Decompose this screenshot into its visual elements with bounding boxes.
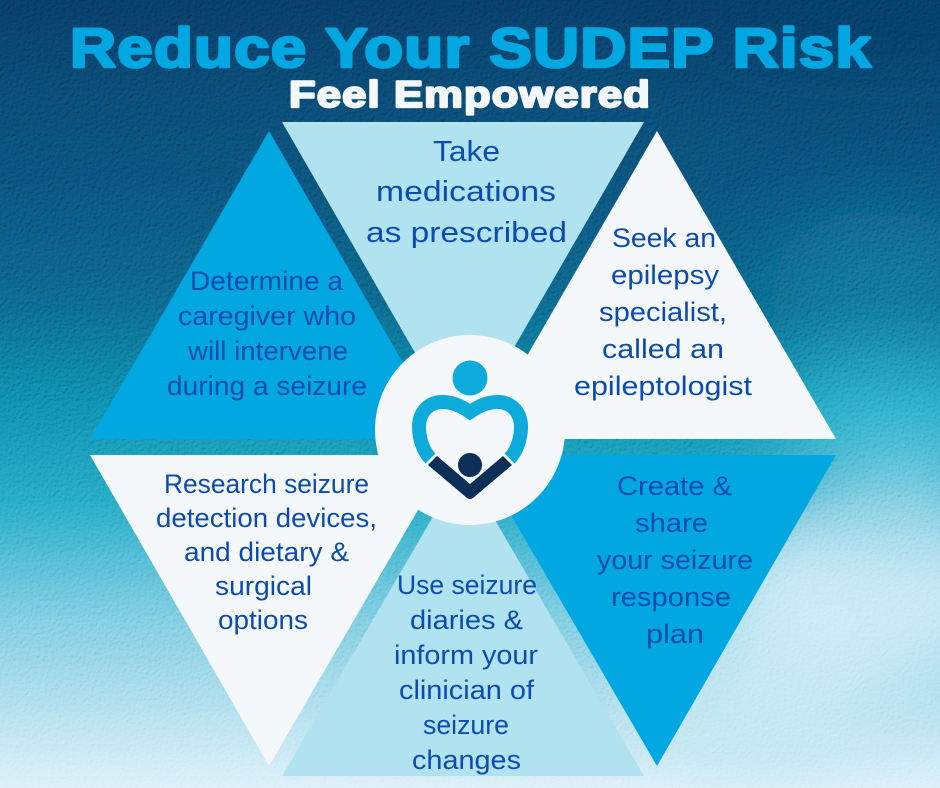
panel: research seizure detection devices — [90, 455, 450, 766]
panel: use seizure diaries: inform your — [394, 640, 538, 670]
panel: determine a caregiver — [90, 131, 447, 439]
panel: seek an epilepsy specialist: epilepsy — [611, 260, 720, 290]
panel: create and share response plan: share — [635, 508, 708, 538]
panel: take medications: Take — [433, 136, 500, 168]
panel: take medications: medications — [376, 176, 556, 208]
panel: seek an epilepsy specialist: Seek an — [612, 223, 716, 253]
panel: seek an epilepsy specialist: called an — [602, 334, 724, 364]
panel: determine a caregiver: Determine a — [190, 266, 344, 296]
panel: use seizure diaries: seizure — [423, 710, 509, 740]
panel: research seizure detection devices: Research seizure — [164, 469, 369, 499]
title: Reduce Your SUDEP Risk — [70, 16, 872, 79]
panel: research seizure detection devices: and dietary & — [184, 537, 349, 567]
center circle — [375, 335, 565, 525]
panel: determine a caregiver: will intervene — [187, 336, 348, 366]
panel: research seizure detection devices: detection devices, — [156, 503, 377, 533]
panel: use seizure diaries: clinician of — [399, 675, 535, 705]
panel: use seizure diaries: changes — [412, 745, 521, 775]
panel: create and share response plan: your seizure — [597, 545, 753, 575]
panel: use seizure diaries: diaries & — [410, 605, 523, 635]
panel: create and share response plan: response — [611, 582, 731, 612]
panel: seek an epilepsy specialist: epileptologist — [574, 371, 753, 401]
panel: create and share response plan: Create & — [617, 471, 732, 501]
panel: determine a caregiver: caregiver who — [178, 301, 356, 331]
panel: research seizure detection devices: surgical — [215, 571, 312, 601]
panel: create and share response plan — [476, 455, 836, 766]
panel: seek an epilepsy specialist: specialist, — [599, 297, 727, 327]
panel: use seizure diaries — [282, 465, 644, 776]
panel: determine a caregiver: during a seizure — [167, 371, 367, 401]
icon: heart logo — [419, 360, 521, 499]
panel: create and share response plan: plan — [646, 619, 704, 649]
panel: take medications — [282, 122, 644, 436]
panel: seek an epilepsy specialist — [479, 131, 836, 439]
panel: research seizure detection devices: options — [218, 605, 308, 635]
subtitle: Feel Empowered — [289, 74, 651, 115]
panel: use seizure diaries: Use seizure — [397, 570, 537, 600]
panel: take medications: as prescribed — [366, 217, 567, 249]
